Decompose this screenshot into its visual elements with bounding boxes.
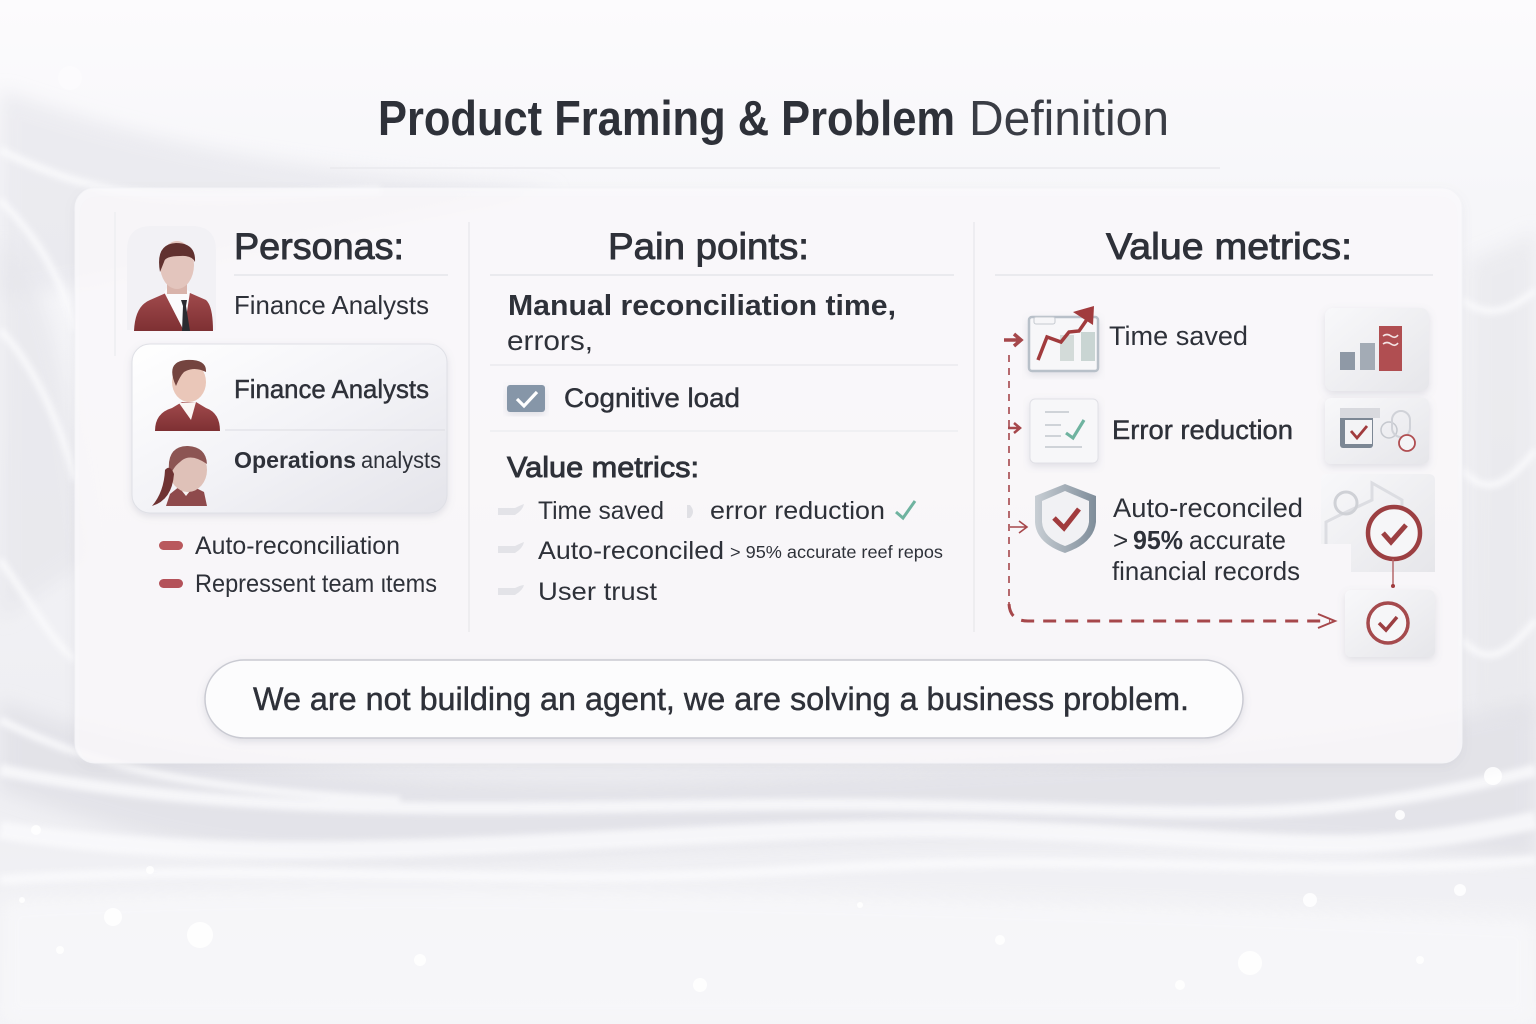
panel: main card (75, 188, 1462, 763)
list: value metrics: > 95% accurate reef repos (730, 542, 943, 562)
text: operations analysts: Operations (234, 447, 356, 473)
text: manual reconciliation (507, 290, 896, 356)
heading: value metrics: Value metrics: (1106, 226, 1352, 267)
heading: personas: Personas: (234, 226, 404, 267)
text: operations analysts (234, 447, 441, 473)
icon: finance persona (155, 360, 220, 431)
list: value metrics: Time saved (538, 497, 664, 525)
icon: checkbox (507, 385, 545, 412)
heading: pain points: Pain points: (608, 226, 809, 267)
icon: male persona (127, 226, 216, 331)
list: persona bullets (159, 532, 437, 598)
callout: key message pill (205, 660, 1243, 738)
text: auto-reconciled: 95% (1133, 525, 1183, 555)
list: persona bullets: Auto-reconciliation (195, 532, 400, 560)
list: value metrics (498, 497, 943, 606)
text: finance analysts highlighted: Finance Analysts (234, 374, 429, 404)
text: auto-reconciled: accurate (1189, 525, 1286, 555)
text: operations analysts: analysts (361, 447, 441, 473)
icon: operations persona (152, 446, 207, 506)
list: persona bullets: Repressent team ιtems (195, 570, 437, 598)
tile: final check (1345, 590, 1435, 657)
tile: people with check badge (1321, 474, 1435, 588)
title: Definition (969, 92, 1169, 146)
text: auto-reconciled (1112, 493, 1303, 586)
text: error reduction: Error reduction (1112, 415, 1293, 445)
title: Product Framing & Problem (378, 92, 955, 146)
text: auto-reconciled: financial records (1112, 556, 1300, 586)
arrow: dashed flow connector (1004, 334, 1335, 628)
icon: trend chart (1029, 306, 1098, 371)
list: value metrics: Auto-reconciled (538, 537, 724, 565)
panel: personas (115, 212, 448, 598)
panel: highlighted personas card (132, 344, 447, 513)
panel: value metrics (995, 226, 1435, 657)
text: cognitive load: Cognitive load (564, 383, 740, 413)
text: auto-reconciled: Auto-reconciled (1113, 493, 1303, 523)
tile: calendar check (1325, 398, 1429, 464)
tile: bar chart (1325, 308, 1429, 391)
text: manual reconciliation: errors, (507, 325, 593, 356)
callout: key message pill: We are not building an agent, we are solving a business problem. (253, 681, 1189, 717)
list: value metrics: User trust (538, 578, 657, 606)
icon: checklist document (1030, 399, 1098, 463)
text: finance analysts: Finance Analysts (234, 290, 429, 320)
text: time saved: Time saved (1109, 321, 1248, 351)
text: auto-reconciled: > (1113, 525, 1128, 555)
list: value metrics: error reduction (710, 497, 885, 525)
subheading: value metrics: Value metrics: (507, 452, 699, 484)
text: manual reconciliation: Manual reconciliation time, (508, 290, 896, 322)
icon: shield check (1035, 484, 1096, 553)
panel: pain points (490, 226, 958, 606)
